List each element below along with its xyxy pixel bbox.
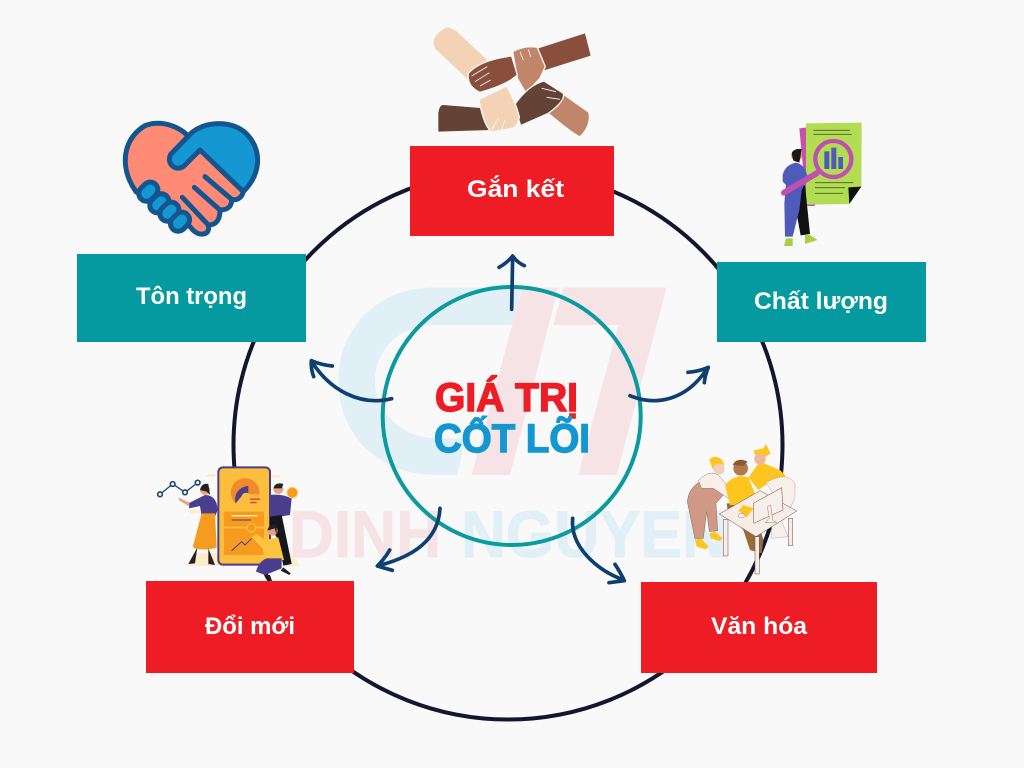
box: Tôn trọng: Tôn trọng [136,283,247,310]
inner circle [383,287,641,545]
box: Chất lượng: Chất lượng [754,288,888,315]
icon: heart handshake [125,123,258,234]
center title: GIÁ TRỊ [435,375,578,420]
arrow: lower left [377,508,440,570]
box: Gắn kết [410,146,614,236]
box: Tôn trọng [77,254,306,342]
arrow: up [499,256,524,309]
arrow: upper right [630,367,708,401]
center title: CỐT LÕI [434,415,590,461]
box: Chất lượng [717,262,926,342]
box: Văn hóa [641,582,877,673]
watermark logo [338,288,667,475]
arrows [311,256,708,583]
watermark text: DINH [289,497,441,571]
center title [434,375,590,461]
icon: team with phone dashboard [158,467,300,581]
watermark text: NGUYEN [461,497,727,571]
watermark text [289,497,727,571]
arrow: lower right [572,518,624,583]
box: Đổi mới [146,581,354,673]
icon: team at computer desk [687,444,797,574]
outer ring [234,170,782,720]
arrow: upper left [311,361,392,401]
box: Gắn kết: Gắn kết [467,175,564,203]
box: Đổi mới: Đổi mới [205,613,295,640]
icon: joined hands [433,27,591,136]
box: Văn hóa: Văn hóa [711,613,808,640]
icon: person inspecting report [783,123,862,246]
